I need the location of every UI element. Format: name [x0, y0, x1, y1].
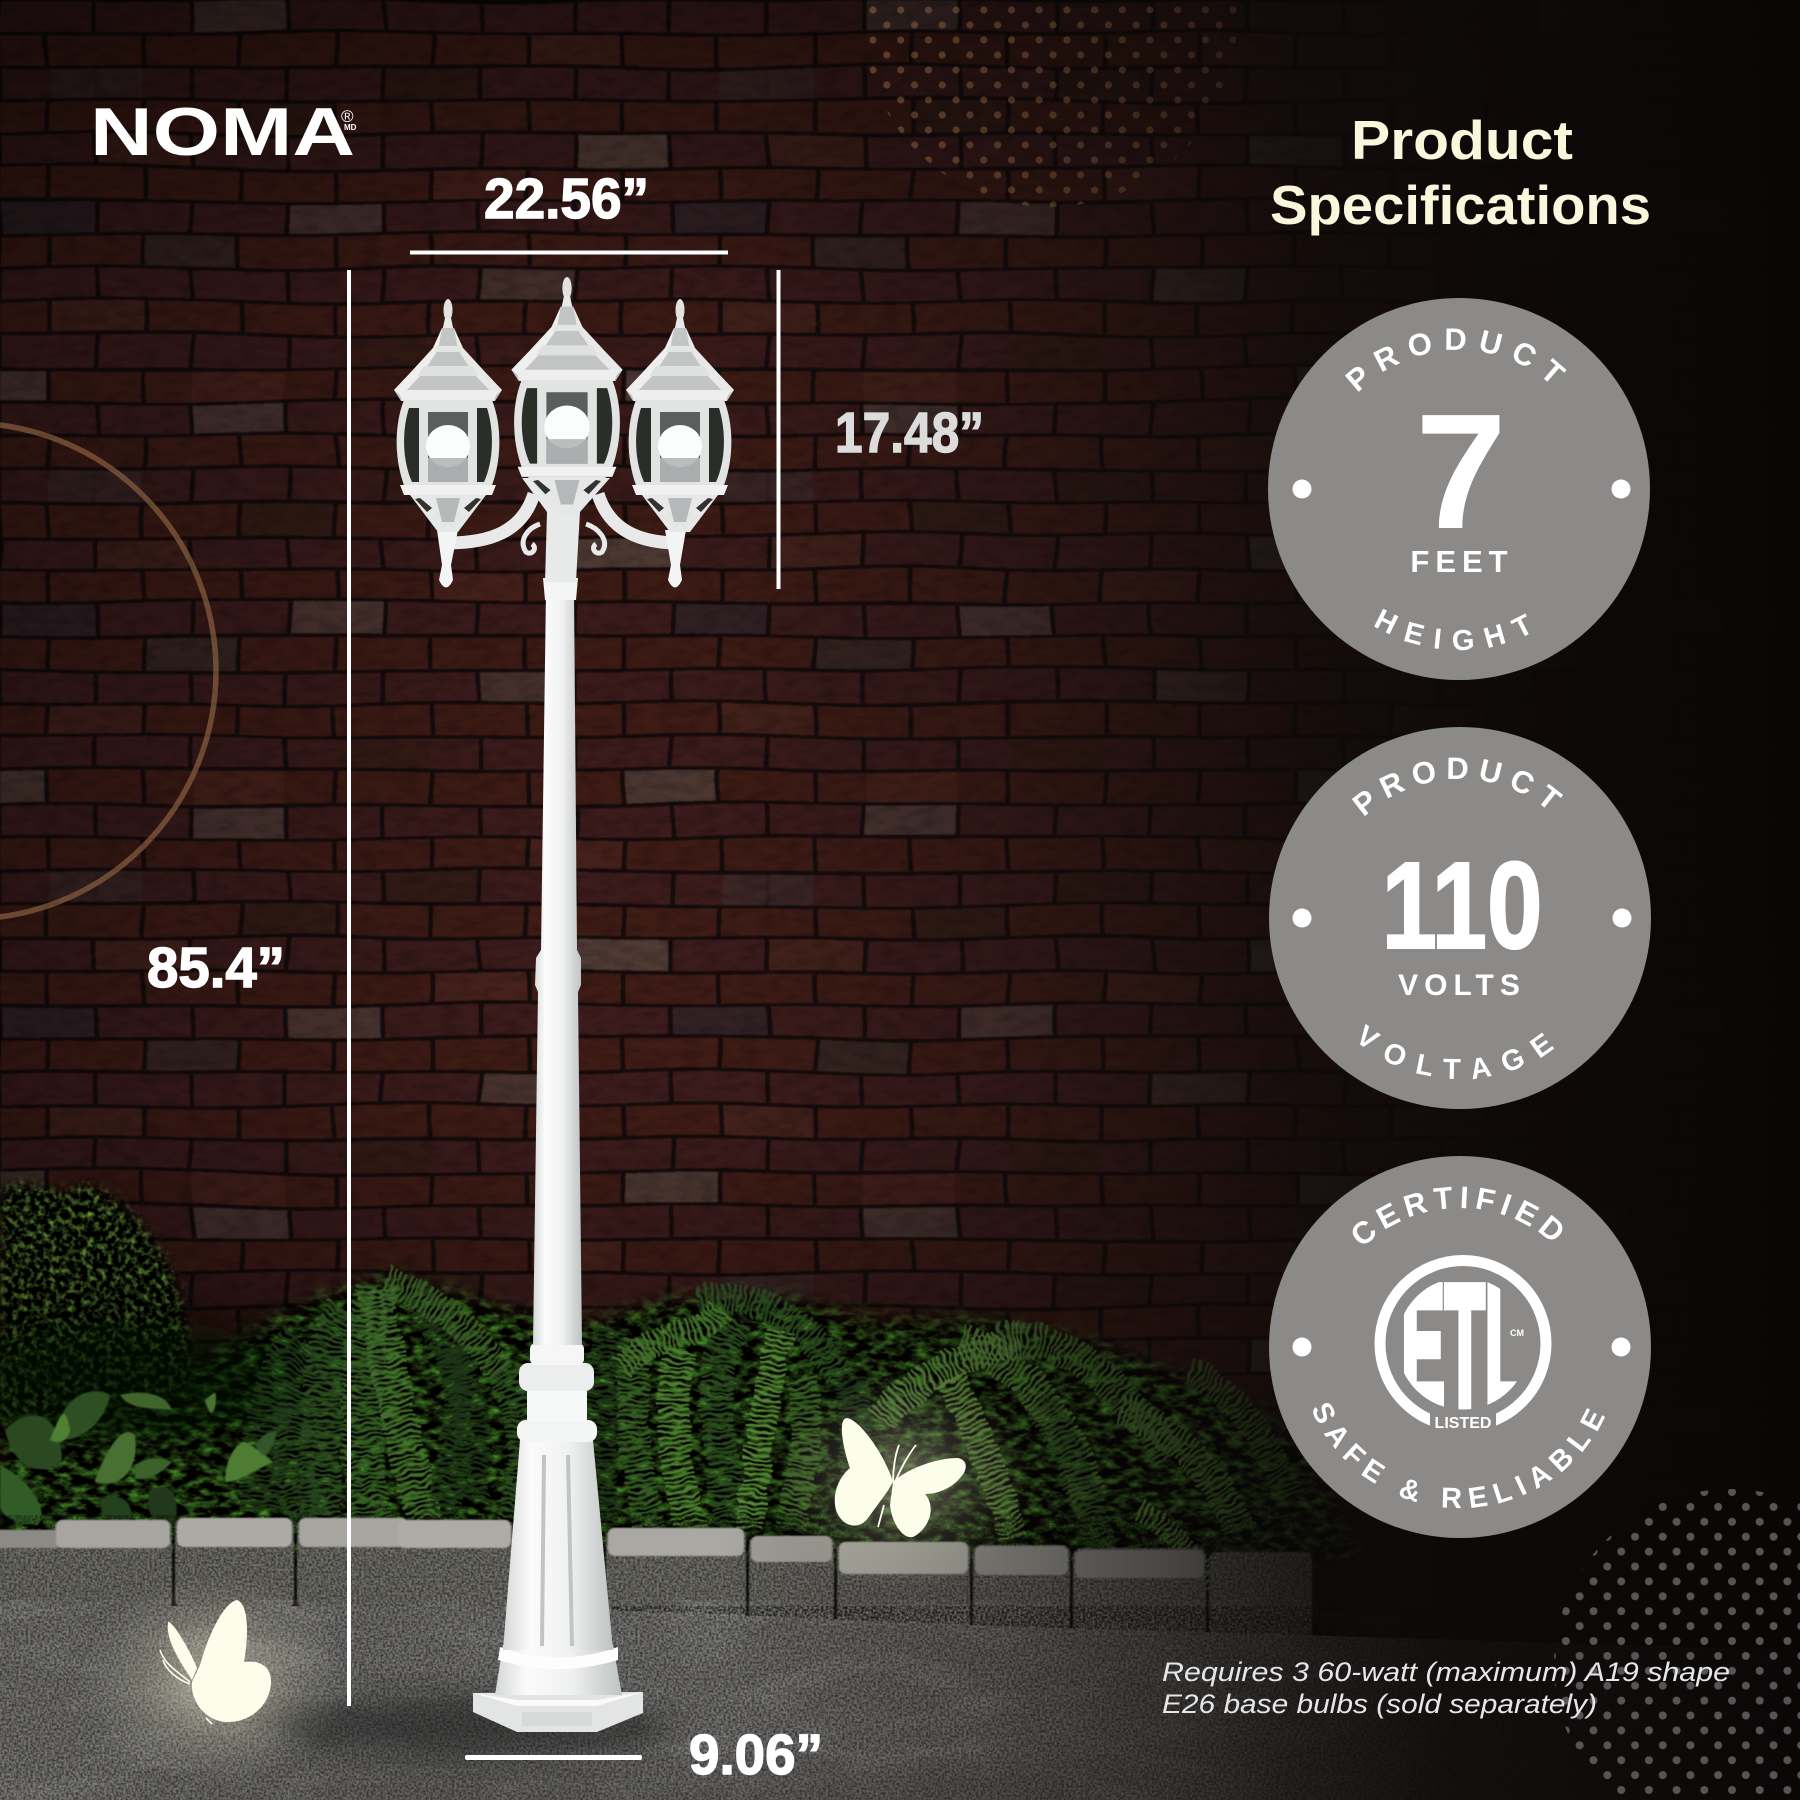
- shadow over left bush: [0, 1320, 300, 1440]
- dimension line: height: [347, 270, 351, 1706]
- dimension line: lantern height: [776, 270, 780, 589]
- plants and ferns: [0, 1183, 1800, 1650]
- fern cluster right of lamp: [598, 1298, 1290, 1620]
- fluted base: [473, 1343, 643, 1732]
- badge: product height: FEET: [1410, 544, 1514, 579]
- label: 22.56 inches: 22.56”: [484, 167, 649, 231]
- NOMA logo: NOMA: [90, 94, 355, 170]
- fern cluster far right: [880, 1340, 1020, 1420]
- pole collar: [543, 578, 578, 600]
- badge: product voltage: VOLTAGE: [1360, 1024, 1554, 1080]
- badge: certified: CERTIFIED: [1352, 1186, 1562, 1244]
- arm drops: [437, 530, 686, 588]
- lamp shadow on ground: [270, 1692, 670, 1760]
- NOMA logo: MD: [344, 123, 357, 132]
- dot pattern at top of wall: [863, 0, 1237, 207]
- badge: certified: SAFE & RELIABLE: [1313, 1403, 1605, 1508]
- badge: product height: [1268, 298, 1650, 680]
- right lantern: [626, 299, 734, 532]
- ETL listed mark: ETL: [1401, 1249, 1525, 1442]
- heading: Product Specifications: Specifications: [1270, 174, 1651, 236]
- badge: product voltage: [1269, 727, 1651, 1109]
- broad leaves: [0, 1391, 276, 1525]
- label: 17.48 inches: 17.48”: [835, 401, 984, 465]
- center lantern: [511, 277, 623, 515]
- badge: product height: PRODUCT: [1345, 328, 1566, 392]
- lamp post: [394, 277, 734, 1732]
- note about bulbs: [1162, 1657, 1730, 1719]
- foliage mass: [0, 1275, 1360, 1560]
- ETL listed mark: LISTED: [1435, 1415, 1491, 1432]
- pole shaft: [533, 590, 582, 1345]
- left bush: [0, 1183, 191, 1420]
- badge: product voltage: PRODUCT: [1352, 758, 1563, 816]
- butterfly lower left: [160, 1600, 271, 1724]
- dimension line: base width: [465, 1755, 642, 1760]
- butterfly glow on ferns: [775, 1372, 1035, 1592]
- fern cluster left of lamp: [262, 1280, 522, 1525]
- badge: certified: [1269, 1156, 1651, 1538]
- dimension line: total width: [410, 250, 728, 254]
- badge: product height: 7: [1415, 380, 1507, 563]
- curb stones: [0, 1515, 1340, 1645]
- badge: product voltage: 110: [1382, 838, 1542, 975]
- lamp arms and scrolls: [447, 494, 680, 553]
- note about bulbs: Requires 3 60-watt (maximum) A19 shape: [1162, 1657, 1730, 1687]
- butterfly on ferns: [835, 1418, 966, 1537]
- ETL listed mark: CM: [1510, 1328, 1524, 1338]
- heading: Product Specifications: [1270, 109, 1651, 236]
- badge: product height: HEIGHT: [1374, 608, 1529, 650]
- NOMA logo: ®: [341, 107, 354, 126]
- badge: product voltage: VOLTS: [1398, 969, 1526, 1002]
- center lamp neck: [522, 478, 610, 582]
- label: 85.4 inches: 85.4”: [147, 936, 285, 1000]
- note about bulbs: E26 base bulbs (sold separately): [1162, 1689, 1597, 1719]
- decorative arc on wall: [0, 423, 216, 919]
- left lantern: [394, 299, 502, 532]
- bottom right dot pattern: [1554, 1489, 1800, 1800]
- butterfly glow on ground: [80, 1575, 350, 1785]
- label: 9.06 inches: 9.06”: [689, 1723, 823, 1787]
- heading: Product Specifications: Product: [1351, 109, 1573, 171]
- asphalt ground: [0, 1600, 1800, 1800]
